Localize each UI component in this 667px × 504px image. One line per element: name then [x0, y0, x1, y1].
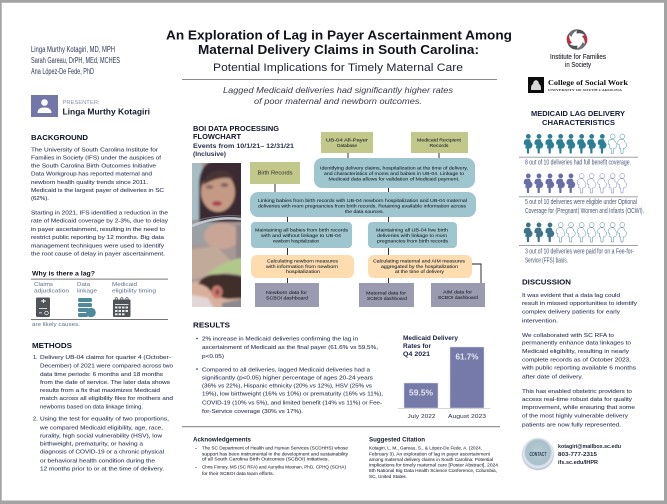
contact details: ifs.sc.edu/IHPR — [558, 460, 598, 466]
box: linking babies: deliveries with mom pregnancies from birth records. Retaining available information across — [258, 203, 467, 208]
bar chart: Medicaid delivery rates: Medicaid Delivery — [403, 335, 458, 342]
title: An Exploration of Lag in Payer Ascertainment Among — [166, 28, 512, 42]
background section: the South Carolina Birth Outcomes Initiative — [31, 164, 156, 170]
discussion section: We collaborated with SC RFA to — [522, 333, 614, 339]
background section: the root cause of delay in payer ascertainment. — [31, 252, 166, 258]
box: calculating newborn measures — [251, 255, 354, 278]
why is there a lag panel: are likely causes. — [32, 322, 80, 328]
logo: College of Social Work — [528, 77, 629, 93]
icon: presenter — [38, 99, 52, 113]
box: maintaining live births: pregnancies from birth records — [377, 238, 449, 244]
suggested citation: implications for timely maternal care [Poster Abstract]. 2024 — [369, 462, 499, 468]
why is there a lag panel — [31, 270, 168, 328]
results section: (36% vs 22%), Hispanic ethnicity (20% vs 12%), HSV (25% vs — [202, 384, 372, 390]
box: identifying delivery claims: Identifying delivery claims, hospitalization at the time of delivery, — [320, 166, 468, 170]
flowchart heading: (Inclusive) — [193, 151, 226, 158]
acknowledgements: The SC Department of Health and Human Services (SCDHHS) whose — [202, 446, 349, 450]
acknowledgements: Acknowledgements — [193, 438, 252, 444]
logo: Institute for Families in Society: Institute for Families — [550, 52, 606, 61]
box: maternal data: SCBOI dashboard — [367, 296, 407, 301]
bar chart: Medicaid delivery rates — [398, 335, 490, 420]
bar chart: Medicaid delivery rates: Q4 2021 — [403, 351, 430, 358]
bar chart: Medicaid delivery rates: July 2022 — [408, 414, 436, 420]
box: maintaining babies: Maintaining all babies from birth records — [255, 228, 349, 232]
methods section: 1. — [33, 355, 38, 361]
bar chart: Medicaid delivery rates: 59.5% — [409, 388, 433, 398]
box: maintaining live births: deliveries with linkage to mom — [377, 233, 447, 238]
box: calculating newborn measures: Calculating newborn measures — [267, 258, 339, 264]
characteristics heading — [531, 111, 625, 127]
results section: Compared to all deliveries, lagged Medicaid deliveries had a — [202, 368, 371, 374]
box: linking babies: Linking babies from birth records with UB-04 newborn hospitalization and UB-04 maternal — [258, 198, 467, 203]
contact details: kotagiri@mailbox.sc.edu — [558, 444, 621, 450]
box: maintaining live births: Maintaining all UB-04 live birth — [376, 228, 448, 232]
methods section: METHODS — [32, 341, 72, 350]
methods section: birthweight, prematurity, or having a — [40, 441, 144, 447]
suggested citation: Suggested Citation — [369, 438, 425, 444]
discussion section: This has enabled obstetric providers to — [522, 389, 632, 395]
box: UB-04 database: Database — [337, 143, 357, 148]
discussion section: permanently enhance data linkages to — [522, 341, 631, 347]
key finding — [223, 86, 453, 106]
box: AIM data: SCBOI dashboard — [438, 295, 478, 300]
methods section — [32, 341, 173, 473]
background section: The University of South Carolina Institute for — [31, 148, 158, 154]
icon: calendar — [113, 298, 130, 317]
methods section: results from a fix that maximizes Medicaid — [40, 388, 160, 394]
discussion section: access real-time robust data for quality — [522, 397, 632, 403]
characteristics heading: MEDICAID LAG DELIVERY — [531, 111, 625, 118]
box: maternal data — [359, 283, 414, 307]
box: identifying delivery claims: and characteristics of moms and babies in UB-04. Linkage to — [324, 171, 464, 176]
box: birth records: Birth Records — [258, 170, 293, 176]
methods section: 2. — [33, 417, 38, 423]
methods section: from the date of service. The later data shows — [40, 380, 170, 386]
flowchart — [250, 132, 485, 307]
authors: Ana López-De Fede, PhD — [31, 67, 94, 76]
background section: in payer ascertainment, resulting in the need to — [31, 227, 165, 233]
methods section: data time periods: 6 months and 18 months — [40, 372, 163, 378]
box: newborn data — [255, 283, 319, 307]
discussion section — [521, 278, 637, 428]
background section: BACKGROUND — [31, 133, 89, 142]
discussion section: of the most highly vulnerable delivery — [522, 414, 628, 420]
methods section: newborns based on data linkage timing. — [40, 405, 143, 411]
acknowledgements — [193, 438, 349, 476]
flowchart heading: FLOWCHART — [193, 134, 242, 141]
box: UB-04 database — [321, 132, 373, 153]
methods section: match across all eligibility files for mothers and — [40, 396, 173, 402]
box: calculating newborn measures: with information from newborn — [266, 264, 338, 269]
discussion section: with public reporting available 6 months — [521, 366, 636, 372]
box: UB-04 database: UB-04 All-Payer — [326, 138, 369, 142]
results section: significantly (p<0.05) higher percentage of ages 20-24 years — [202, 376, 373, 382]
results section: RESULTS — [193, 320, 230, 330]
presenter block: PRESENTER: — [62, 100, 100, 106]
box: Medicaid recipient records — [411, 132, 468, 153]
background section: restrict public reporting by 12 months. Big data — [31, 235, 165, 241]
pictogram: 8 out of 10 full benefit — [519, 134, 638, 166]
box: linking babies: the data sources. — [345, 209, 384, 214]
background section: (62%). — [31, 196, 49, 202]
discussion section: complex delivery patients for early — [522, 309, 620, 315]
key finding: Lagged Medicaid deliveries had significantly higher rates — [223, 86, 453, 95]
box: calculating maternal measures: aggregated by the hospitalization — [381, 264, 458, 269]
title: Potential Implications for Timely Maternal Care — [213, 62, 463, 74]
discussion section: after date of delivery. — [522, 375, 584, 381]
logo: Institute for Families in Society — [550, 26, 606, 69]
contact details — [558, 444, 621, 466]
box: newborn data: Newborn data for — [266, 290, 307, 295]
box: AIM data: AIM data for — [443, 290, 472, 294]
box: calculating maternal measures — [368, 255, 472, 278]
box: maintaining babies: newborn hospitalization — [273, 238, 319, 244]
why is there a lag panel: Claims — [34, 282, 53, 288]
title: Maternal Delivery Claims in South Carolina: — [198, 42, 479, 57]
connectors — [275, 153, 481, 283]
methods section: rurality, high social vulnerability (HSV), low — [40, 433, 163, 439]
presenter block: Linga Murthy Kotagiri — [62, 108, 150, 116]
flowchart heading: BOI DATA PROCESSING — [193, 126, 280, 133]
characteristics heading: CHARACTERISTICS — [542, 120, 615, 127]
logo: College of Social Work: UNIVERSITY OF SOUTH CAROLINA — [548, 88, 623, 92]
contact badge — [522, 438, 554, 470]
authors: Sarah Gareau, DrPH, MEd, MCHES — [31, 56, 120, 65]
results section — [193, 320, 383, 415]
contact details: 803-777-2315 — [558, 452, 597, 458]
acknowledgements: support has been instrumental in the development and sustainability — [202, 451, 349, 456]
discussion section: complete records as of October 2023, — [522, 357, 632, 363]
presenter block — [31, 95, 150, 117]
pictogram: 5 out of 10 optional coverage — [519, 174, 644, 215]
authors: Linga Murthy Kotagiri, MD, MPH — [31, 45, 115, 54]
flowchart heading: Events from 10/1/21– 12/31/21 — [193, 143, 294, 150]
title — [166, 28, 512, 74]
authors — [31, 45, 120, 76]
why is there a lag panel: Data — [77, 282, 90, 288]
box: maintaining babies — [251, 222, 352, 248]
background section — [31, 133, 168, 258]
box: calculating maternal measures: Calculating maternal and AIM measures — [373, 258, 466, 264]
results section: COVID-19 (10% vs 5%), and limited benefit (14% vs 11%) or Fee- — [202, 400, 382, 406]
background section: Families in Society (IFS) under the auspices of — [31, 156, 161, 162]
pictogram: 3 out of 10 fee-for-service: Service (FFS) basis. — [525, 258, 568, 264]
bar chart: Medicaid delivery rates: Rates for — [403, 343, 431, 350]
why is there a lag panel: adjudication — [34, 288, 69, 294]
contact badge: CONTACT — [530, 452, 547, 458]
logo: Institute for Families in Society: in Society — [565, 60, 591, 69]
bar chart: Medicaid delivery rates: August 2023 — [448, 414, 486, 420]
why is there a lag panel: linkage — [77, 288, 97, 294]
box: maintaining live births — [368, 222, 457, 248]
box: linking babies — [250, 192, 476, 217]
discussion section: intervention. — [522, 318, 559, 324]
discussion section: It was evident that a data lag could — [522, 293, 620, 299]
suggested citation: February 3). An exploration of lag in payer ascertainment — [369, 451, 491, 456]
icon: data linkage — [78, 298, 96, 317]
pictogram: 3 out of 10 fee-for-service — [519, 222, 638, 264]
background section: Starting in 2021, IFS identified a reduction in the — [31, 210, 168, 216]
results section: ascertainment of Medicaid as the final payer (61.6% vs 59.5%, — [202, 345, 379, 351]
box: maternal data: Maternal data for — [366, 290, 406, 296]
box: Medicaid recipient records: Medicaid Recipient — [417, 138, 462, 142]
acknowledgements: Chris Finney, MS (SC RFA) and Aunyika Moonan, PhD, CPHQ (SCHA) — [202, 464, 347, 470]
results section: 19%), low birthweight (16% vs 10%) or prematurity (16% vs 11%), — [202, 392, 383, 398]
suggested citation: among maternal delivery claims in South Carolina: Potential — [369, 457, 493, 462]
why is there a lag panel: eligibility timing — [112, 288, 156, 294]
background section: management techniques were used to identify — [31, 244, 164, 250]
suggested citation — [369, 438, 499, 479]
acknowledgements: for their SCBOI data team efforts. — [202, 471, 274, 476]
box: newborn data: SCBOI dashboard — [266, 296, 308, 300]
discussion section: Medicaid eligibility, resulting in nearly — [522, 349, 629, 355]
suggested citation: Kotagiri, L. M., Gareau, S., & López-De Fede, A. (2024, — [369, 446, 482, 450]
box: maintaining babies: with and without linkage to UB-04 — [261, 233, 341, 238]
discussion section: patients are now fully represented. — [522, 422, 622, 428]
box: identifying delivery claims: Medicaid data allows for validation of Medicaid payment. — [328, 176, 460, 182]
why is there a lag panel: Why is there a lag? — [32, 270, 95, 278]
box: AIM data — [431, 283, 485, 307]
methods section: Using the test for equality of two proportions, — [40, 417, 170, 423]
icon: claims — [36, 298, 50, 317]
background section: Data Workgroup has reported maternal and — [31, 172, 152, 178]
background section: rate of Medicaid coverage by 2-3%, due to delay — [31, 218, 168, 224]
pictogram: 8 out of 10 full benefit: 8 out of 10 deliveries had full benefit coverage. — [525, 160, 631, 166]
box: Medicaid recipient records: Records — [430, 143, 449, 148]
methods section: diagnosis of COVID-19 or a chronic physical — [40, 449, 164, 455]
results section: p<0.05) — [202, 354, 224, 360]
methods section: or behavioral health condition during the — [40, 459, 155, 465]
methods section: we compared Medicaid eligibility, age, race, — [39, 425, 163, 431]
discussion section: improvement, while ensuring that some — [522, 405, 635, 411]
photo: mother and newborn — [192, 163, 241, 307]
methods section: 12 months prior to or at the time of delivery. — [40, 467, 164, 473]
box: calculating maternal measures: at the time of delivery — [395, 269, 445, 274]
suggested citation: SC, United States. — [369, 474, 407, 479]
logo: College of Social Work: College of Social Work — [548, 78, 629, 87]
methods section: December) of 2021 were compared across two — [40, 363, 173, 369]
background section: newborn health quality trends since 2011. — [31, 180, 149, 186]
box: calculating newborn measures: hospitalization — [286, 269, 320, 274]
bar chart: Medicaid delivery rates: 61.7% — [456, 352, 478, 362]
results section: 2% increase in Medicaid deliveries confirming the lag in — [202, 337, 358, 343]
background section: Medicaid is the largest payer of deliveries in SC — [31, 188, 164, 194]
acknowledgements: of all South Carolina Birth Outcomes (SCBOI) initiatives. — [202, 456, 329, 462]
results section: for-Service coverage (30% vs 17%). — [202, 409, 303, 415]
discussion section: result in missed opportunities to identify — [522, 301, 637, 307]
why is there a lag panel: Medicaid — [112, 282, 137, 288]
suggested citation: 5th National Big Data Health Science Conference, Columbia, — [369, 468, 497, 473]
methods section: Delivery UB-04 claims for quarter 4 (October- — [40, 355, 171, 361]
flowchart heading — [193, 126, 294, 158]
key finding: of poor maternal and newborn outcomes. — [254, 97, 422, 106]
box: birth records — [250, 162, 300, 184]
box: identifying delivery claims — [314, 158, 475, 188]
discussion section: DISCUSSION — [522, 278, 571, 286]
